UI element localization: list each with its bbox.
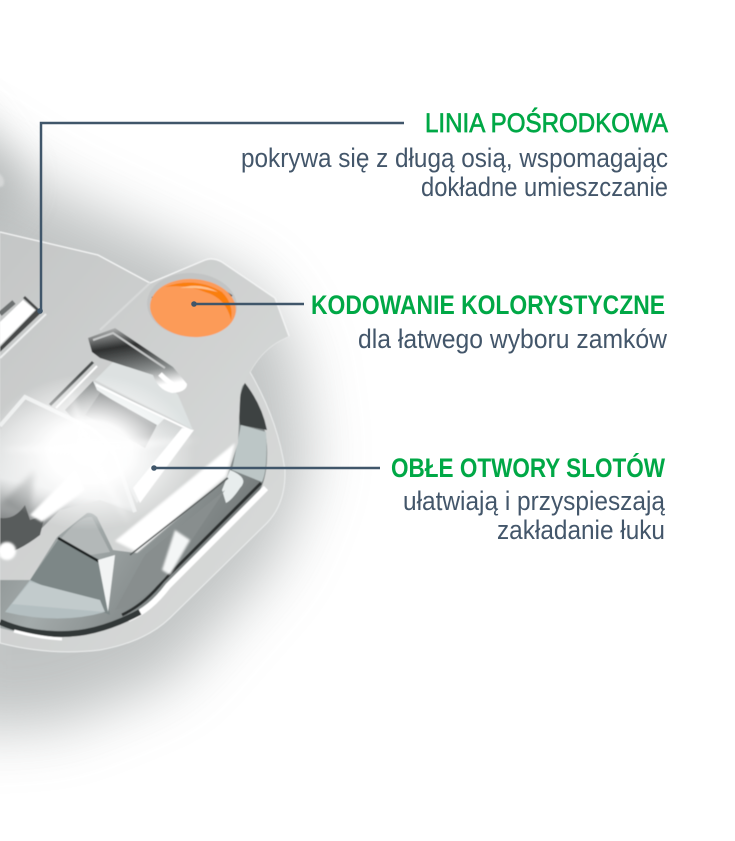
heading: colour coding: KODOWANIE KOLORYSTYCZNE (311, 290, 665, 320)
description: midline (241, 143, 668, 202)
description: midline: dokładne umieszczanie (421, 172, 668, 202)
leader line: midline (41, 123, 404, 310)
description: colour coding: dla łatwego wyboru zamków (358, 324, 667, 354)
metal bowl around the base (0, 383, 267, 639)
leader line: colour coding (194, 303, 304, 305)
base plate (0, 232, 289, 652)
callout: midline (37, 106, 668, 314)
heading: slots: OBŁE OTWORY SLOTÓW (391, 452, 665, 483)
leader dot: colour coding (191, 301, 197, 307)
right slot recess (50, 360, 194, 503)
heading: midline: LINIA POŚRODKOWA (425, 106, 668, 138)
callout: rounded slot openings (151, 452, 666, 545)
leader dot: midline (37, 308, 43, 314)
central hook (88, 328, 187, 393)
drop shadow behind bracket (0, 95, 310, 730)
orthodontic bracket illustration (0, 232, 289, 652)
description: slots: zakładanie łuku (497, 515, 665, 545)
left slot recess (0, 397, 135, 560)
callout: colour coding (191, 290, 667, 354)
top outline highlight (0, 232, 289, 336)
description: slots (403, 486, 666, 545)
description: slots: ułatwiają i przyspieszają (403, 486, 666, 516)
leader line: slots (154, 467, 380, 469)
central body with wings (0, 232, 289, 580)
colour code orange marker (145, 270, 239, 340)
leader dot: slots (151, 465, 157, 471)
left tie wing stripe (0, 296, 46, 358)
description: midline: pokrywa się z długą osią, wspomagając (241, 143, 668, 173)
white highlight strip (115, 443, 235, 552)
lens flare (0, 374, 200, 530)
